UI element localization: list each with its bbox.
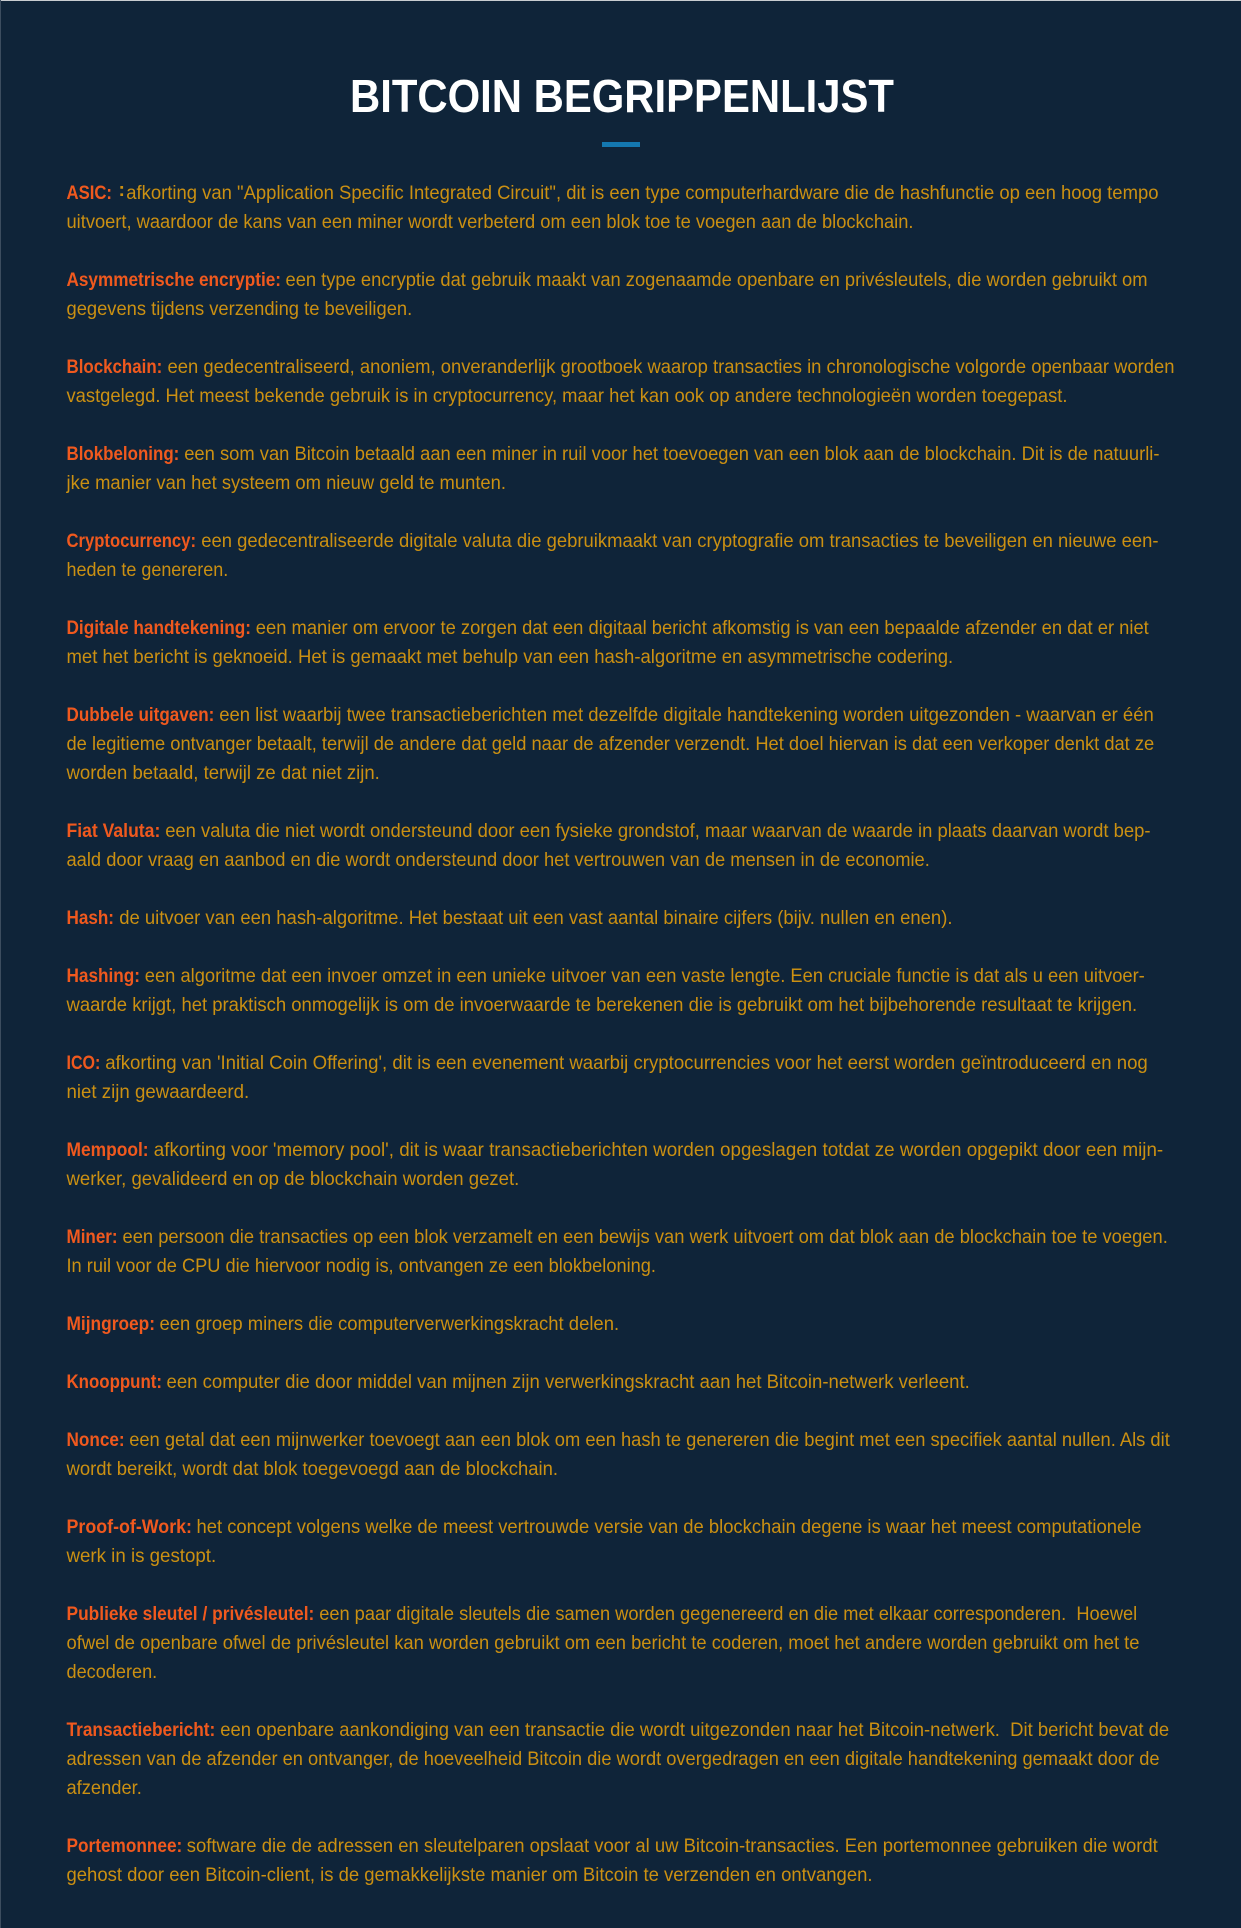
entry: Mempool: afkorting voor 'memory pool', dit is waar transactieberichten worden opgeslagen totdat ze worden opgepikt door een mijn- [154,1140,1163,1161]
entry: Hashing: Hashing: [66,966,140,987]
entry: Nonce [66,1430,1170,1480]
title: BITCOIN BEGRIPPENLIJST [350,70,894,122]
entry: Dubbele uitgaven: worden betaald, terwijl ze dat niet zijn. [66,763,380,784]
entry: Hash: Hash: [66,908,114,929]
entry: Transactiebericht: een openbare aankondiging van een transactie die wordt uitgezonden naar het Bitcoin-netwerk. Dit bericht bevat de [220,1720,1169,1741]
entry: Asymmetrische encryptie: een type encryptie dat gebruik maakt van zogenaamde openbare en privésleutels, die worden gebruikt om [286,270,1148,291]
entry: Proof-of-Work: Proof-of-Work: [66,1517,192,1538]
entry: Digitale handtekening: een manier om ervoor te zorgen dat een digitaal bericht afkomstig is van een bepaalde afzender en dat er niet [256,618,1149,639]
entry: Proof-of-Work: het concept volgens welke de meest vertrouwde versie van de blockchain degene is waar het meest computationele [196,1517,1142,1538]
title accent bar [602,142,640,147]
entry: Miner: een persoon die transacties op een blok verzamelt en een bewijs van werk uitvoert om dat blok aan de blockchain toe te voegen. [122,1227,1168,1248]
entry: Cryptocurrency: een gedecentraliseerde digitale valuta die gebruikmaakt van cryptografie om transacties te beveiligen en nieuwe een- [201,531,1158,552]
entry: ICO: ICO: [66,1053,100,1074]
entry: Portemonnee: Portemonnee: [66,1836,182,1857]
entry: Publieke sleutel / privésleutel: een paar digitale sleutels die samen worden gegenereerd en die met elkaar corresponderen. Hoewel [319,1604,1137,1625]
entry: Publieke sleutel / privésleutel: ofwel de openbare ofwel de privésleutel kan worden gebruikt om een bericht te coderen, moet het andere worden gebruikt om het te [66,1633,1140,1654]
entry: Blockchain: een gedecentraliseerd, anoniem, onveranderlijk grootboek waarop transacties in chronologische volgorde openbaar worden [168,357,1174,378]
entry: Miner: Miner: [66,1227,118,1248]
entry: Publieke sleutel / privésleutel [66,1604,1140,1683]
entry: Publieke sleutel / privésleutel: decoderen. [66,1662,157,1683]
entry: Miner: In ruil voor de CPU die hiervoor nodig is, ontvangen ze een blokbeloning. [66,1256,656,1277]
entry: Asymmetrische encryptie [66,270,1148,320]
entry: Dubbele uitgaven: Dubbele uitgaven: [66,705,214,726]
entry: Hashing: waarde krijgt, het praktisch onmogelijk is om de invoerwaarde te berekenen die is gebruikt om het bijbehorende resultaat te krijgen. [66,995,1137,1016]
entry: Hashing [66,966,1145,1016]
entry: Portemonnee: gehost door een Bitcoin-client, is de gemakkelijkste manier om Bitcoin te verzenden en ontvangen. [66,1865,872,1886]
entry: Fiat Valuta: een valuta die niet wordt ondersteund door een fysieke grondstof, maar waarvan de waarde in plaats daarvan wordt bep- [165,821,1150,842]
entry: Mempool [66,1140,1163,1190]
entry: Nonce: een getal dat een mijnwerker toevoegt aan een blok om een hash te genereren die begint met een specifiek aantal nullen. Als dit [129,1430,1170,1451]
entry: ICO: afkorting van 'Initial Coin Offering', dit is een evenement waarbij cryptocurrencies voor het eerst worden geïntroduceerd en nog [105,1053,1148,1074]
entry: Blokbeloning: een som van Bitcoin betaald aan een miner in ruil voor het toevoegen van een blok aan de blockchain. Dit is de natuurli- [184,444,1159,465]
entry: Dubbele uitgaven [66,705,1154,784]
entry: Transactiebericht: afzender. [66,1778,142,1799]
entry: Cryptocurrency: heden te genereren. [66,560,228,581]
entry: Hash: de uitvoer van een hash-algoritme. Het bestaat uit een vast aantal binaire cijfers (bijv. nullen en enen). [119,908,952,929]
entry: Knooppunt: Knooppunt: [66,1372,162,1393]
entry: ASIC: : [118,180,125,201]
entry: Dubbele uitgaven: een list waarbij twee transactieberichten met dezelfde digitale handtekening worden uitgezonden - waarvan er één [219,705,1154,726]
entry: Portemonnee: software die de adressen en sleutelparen opslaat voor al uw Bitcoin-transacties. Een portemonnee gebruiken die wordt [187,1836,1158,1857]
entry: ASIC [66,180,1158,233]
entry: Transactiebericht: adressen van de afzender en ontvanger, de hoeveelheid Bitcoin die wordt overgedragen en een digitale handtekening gemaakt door de [66,1749,1160,1770]
entry: Portemonnee [66,1836,1158,1886]
entry: Digitale handtekening [66,618,1149,668]
entry: Cryptocurrency [66,531,1158,581]
entry: Proof-of-Work: werk in is gestopt. [66,1546,216,1567]
entry: Dubbele uitgaven: de legitieme ontvanger betaalt, terwijl de andere dat geld naar de afzender verzendt. Het doel hiervan is dat een verkoper denkt dat ze [66,734,1154,755]
entry: ASIC: uitvoert, waardoor de kans van een miner wordt verbeterd om een blok toe te voegen aan de blockchain. [66,212,914,233]
entry: Blokbeloning [66,444,1160,494]
entry: Mempool: Mempool: [66,1140,149,1161]
entry: Digitale handtekening: Digitale handtekening: [66,618,251,639]
entry: Fiat Valuta [66,821,1150,871]
entry: Proof-of-Work [66,1517,1141,1567]
entry: Publieke sleutel / privésleutel: Publieke sleutel / privésleutel: [66,1604,314,1625]
entry: Transactiebericht [66,1720,1169,1799]
entry: Fiat Valuta: aald door vraag en aanbod en die wordt ondersteund door het vertrouwen van de mensen in de economie. [66,850,930,871]
entry: Knooppunt: een computer die door middel van mijnen zijn verwerkingskracht aan het Bitcoin-netwerk verleent. [166,1372,970,1393]
entry: Blockchain: Blockchain: [66,357,162,378]
entry: Blokbeloning: Blokbeloning: [66,444,179,465]
entry: Blokbeloning: jke manier van het systeem om nieuw geld te munten. [66,473,506,494]
entry: Fiat Valuta: Fiat Valuta: [66,821,160,842]
entry: ASIC: afkorting van "Application Specific Integrated Circuit", dit is een type computerhardware die de hashfunctie op een hoog tempo [126,183,1159,204]
entry: Blockchain: vastgelegd. Het meest bekende gebruik is in cryptocurrency, maar het kan ook op andere technologieën worden toegepast. [66,386,1068,407]
entry: Cryptocurrency: Cryptocurrency: [66,531,196,552]
entry: Asymmetrische encryptie: Asymmetrische encryptie: [66,270,281,291]
entry: ICO [66,1053,1148,1103]
entry: ICO: niet zijn gewaardeerd. [66,1082,249,1103]
entry: Mempool: werker, gevalideerd en op de blockchain worden gezet. [66,1169,519,1190]
entry: Mijngroep: Mijngroep: [66,1314,155,1335]
entry: Nonce: Nonce: [66,1430,125,1451]
entry: Asymmetrische encryptie: gegevens tijdens verzending te beveiligen. [66,299,412,320]
entry: Digitale handtekening: met het bericht is geknoeid. Het is gemaakt met behulp van een hash-algoritme en asymmetrische codering. [66,647,953,668]
entry: Miner [66,1227,1168,1277]
entry: Mijngroep: een groep miners die computerverwerkingskracht delen. [160,1314,619,1335]
entry: Hashing: een algoritme dat een invoer omzet in een unieke uitvoer van een vaste lengte. Een cruciale functie is dat als u een uitvoer- [145,966,1145,987]
entry: Nonce: wordt bereikt, wordt dat blok toegevoegd aan de blockchain. [66,1459,558,1480]
entry: Blockchain [66,357,1174,407]
entry: Transactiebericht: Transactiebericht: [66,1720,215,1741]
entry: ASIC: ASIC: [66,183,112,204]
